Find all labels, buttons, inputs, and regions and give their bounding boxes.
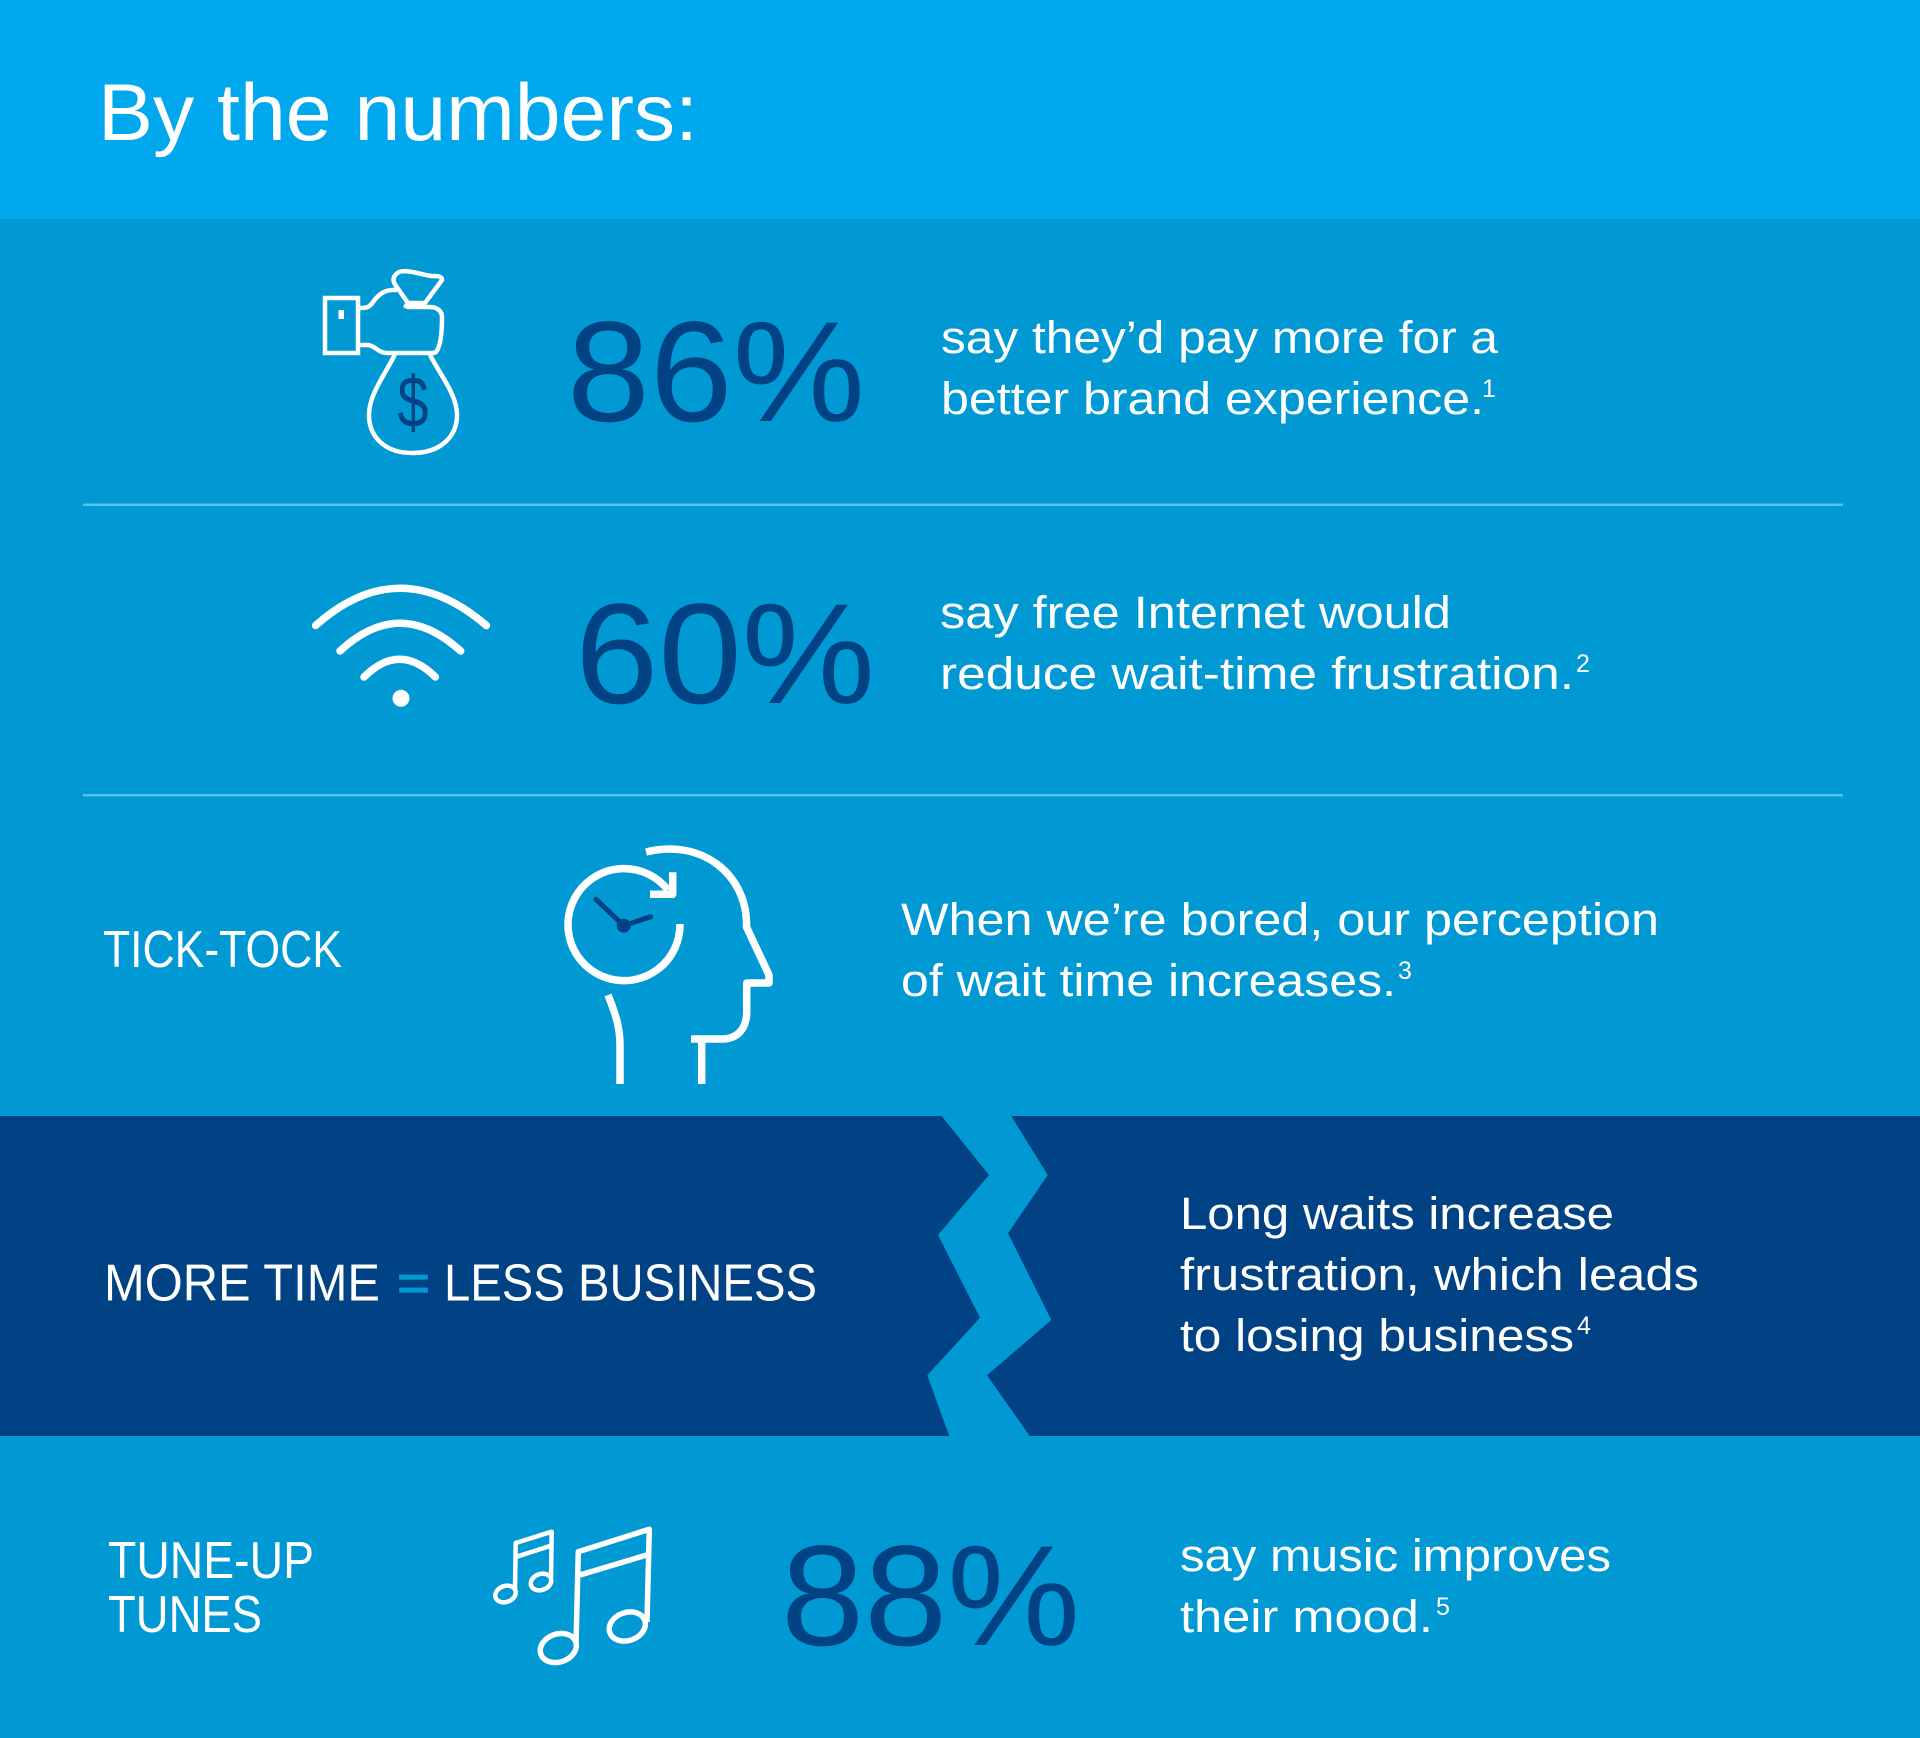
text: wait-time frustration: reduce wait-time frustration. [940,648,1574,699]
panel: more time less business [0,1116,1920,1436]
text: wait-time frustration: 2 [1576,650,1590,678]
heading: tune-up tunes: TUNES [108,1586,262,1644]
title: By the numbers: [98,68,698,158]
text: wait-time frustration [940,587,1590,699]
icon: hand holding money bag [325,271,457,453]
text: better brand experience: 1 [1482,375,1496,403]
text: long waits: to losing business [1180,1310,1574,1361]
text: boredom and wait time [901,894,1659,1006]
row: tune-up tunes [108,1517,1611,1676]
stat: 86%: 86% [567,293,865,452]
text: music improves mood: their mood. [1180,1591,1433,1642]
heading: more time equals less business [104,1254,817,1312]
heading: more time equals less business: = [397,1254,430,1312]
text: boredom and wait time: of wait time increases. [901,955,1396,1006]
icon: wifi [316,588,486,707]
text: better brand experience [941,312,1499,424]
stat: 60%: 60% [575,575,875,734]
text: better brand experience: say they’d pay more for a [941,312,1499,363]
text: long waits: frustration, which leads [1180,1249,1699,1300]
text: wait-time frustration: say free Internet would [940,587,1451,638]
heading: more time equals less business: MORE TIME [104,1254,380,1312]
text: music improves mood [1180,1530,1611,1642]
heading: tune-up tunes: TUNE-UP [108,1532,314,1590]
text: music improves mood: say music improves [1180,1530,1611,1581]
heading: tune-up tunes [108,1532,314,1644]
text: boredom and wait time: 3 [1398,957,1412,985]
text: long waits [1180,1188,1699,1361]
dark band with zigzag tear [0,1116,1920,1436]
text: long waits: Long waits increase [1180,1188,1614,1239]
icon: head with clock [568,849,769,1084]
heading: tick-tock: TICK-TOCK [103,921,342,979]
text: boredom and wait time: When we’re bored, our perception [901,894,1659,945]
stat: 88%: 88% [781,1517,1080,1676]
icon: hand holding money bag: $ [398,363,428,443]
row: 60% free internet [316,575,1590,734]
row: 86% pay more [325,271,1499,453]
icon: music notes [493,1529,649,1667]
text: better brand experience: better brand experience. [941,373,1484,424]
text: music improves mood: 5 [1436,1593,1450,1621]
header band [0,0,1920,219]
heading: more time equals less business: LESS BUSINESS [444,1254,817,1312]
text: long waits: 4 [1577,1312,1591,1340]
row: tick-tock [103,849,1659,1084]
